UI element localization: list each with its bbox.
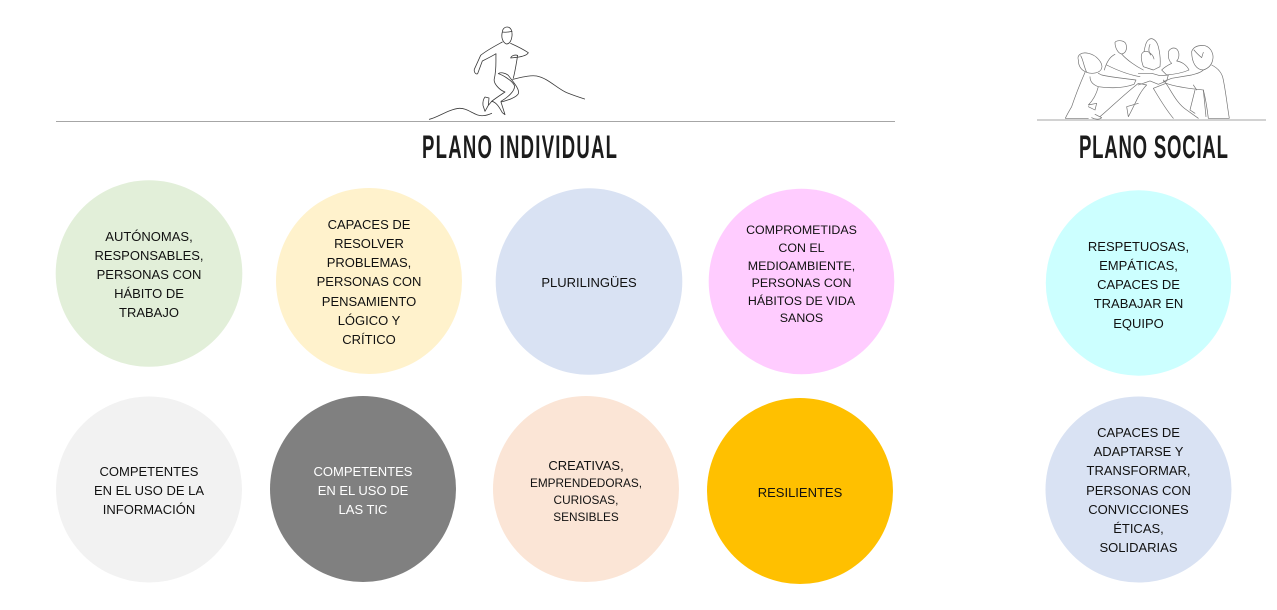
circle: comprometidas con el medioambiente: COMPROMETIDAS	[746, 223, 857, 237]
circle: capaces de adaptarse: PERSONAS CON	[1086, 483, 1191, 498]
circle: autónomas: PERSONAS CON	[97, 267, 201, 282]
icon: group of people line drawing	[1065, 39, 1229, 119]
circle: creativas: EMPRENDEDORAS,	[530, 476, 642, 490]
circle: plurilingües	[496, 188, 682, 375]
circle: respetuosas: CAPACES DE	[1097, 277, 1180, 292]
circle: autónomas: TRABAJO	[119, 305, 179, 320]
circle: competentes TIC	[270, 396, 456, 582]
circle: comprometidas con el medioambiente: MEDIOAMBIENTE,	[748, 259, 855, 273]
divider rule: individual	[56, 120, 895, 122]
heading: plano social: PLANO SOCIAL	[1079, 129, 1228, 165]
circle: capaces de resolver problemas: PERSONAS CON	[317, 274, 421, 289]
circle: competentes información: INFORMACIÓN	[103, 502, 195, 517]
circle: capaces de resolver problemas	[276, 188, 462, 374]
circle: capaces de resolver problemas: PROBLEMAS,	[327, 255, 411, 270]
circle: comprometidas con el medioambiente: PERSONAS CON	[752, 276, 851, 290]
circle: capaces de adaptarse: ADAPTARSE Y	[1094, 444, 1184, 459]
circle: comprometidas con el medioambiente: SANOS	[780, 311, 823, 325]
circle: respetuosas: EQUIPO	[1113, 316, 1164, 331]
circle: capaces de adaptarse: SOLIDARIAS	[1099, 540, 1178, 555]
circle: competentes TIC: COMPETENTES	[314, 464, 413, 479]
circle: capaces de adaptarse: TRANSFORMAR,	[1086, 463, 1190, 478]
circle: comprometidas con el medioambiente: CON EL	[778, 241, 825, 255]
circle: creativas: CREATIVAS,	[548, 458, 624, 473]
circle: creativas: SENSIBLES	[553, 510, 619, 524]
circle: capaces de resolver problemas: PENSAMIENTO	[322, 294, 416, 309]
circle: autónomas: HÁBITO DE	[114, 286, 184, 301]
circle: autónomas	[56, 180, 242, 367]
circle: comprometidas con el medioambiente	[709, 189, 894, 374]
circle: respetuosas	[1046, 190, 1231, 376]
circle: capaces de resolver problemas: RESOLVER	[334, 236, 404, 251]
circle: capaces de resolver problemas: CAPACES DE	[328, 217, 411, 232]
circle: competentes información: EN EL USO DE LA	[94, 483, 204, 498]
circle: capaces de adaptarse: CAPACES DE	[1097, 425, 1180, 440]
circle: resilientes	[707, 398, 893, 584]
circle: plurilingües: PLURILINGÜES	[541, 275, 637, 290]
circle: capaces de resolver problemas: CRÍTICO	[342, 332, 396, 347]
circle: competentes información: COMPETENTES	[100, 464, 199, 479]
circle: comprometidas con el medioambiente: HÁBITOS DE VIDA	[748, 293, 856, 308]
circle: capaces de adaptarse: CONVICCIONES	[1088, 502, 1189, 517]
circle: respetuosas: RESPETUOSAS,	[1088, 239, 1189, 254]
circle: competentes información	[56, 396, 242, 582]
circle: competentes TIC: LAS TIC	[339, 502, 387, 517]
circle: respetuosas: EMPÁTICAS,	[1099, 258, 1178, 273]
divider rule: social	[1037, 119, 1266, 121]
circle: capaces de adaptarse	[1046, 396, 1232, 582]
circle: autónomas: RESPONSABLES,	[94, 248, 204, 263]
icon: running person line drawing	[429, 27, 585, 119]
heading: plano individual: PLANO INDIVIDUAL	[422, 129, 617, 165]
circle: respetuosas: TRABAJAR EN	[1094, 296, 1183, 311]
circle: creativas: CURIOSAS,	[554, 493, 618, 507]
circle: autónomas: AUTÓNOMAS,	[105, 229, 193, 244]
circle: resilientes: RESILIENTES	[758, 485, 843, 500]
circle: capaces de resolver problemas: LÓGICO Y	[338, 313, 401, 328]
circle: capaces de adaptarse: ÉTICAS,	[1113, 521, 1164, 536]
circle: creativas	[493, 396, 679, 582]
circle: competentes TIC: EN EL USO DE	[318, 483, 409, 498]
